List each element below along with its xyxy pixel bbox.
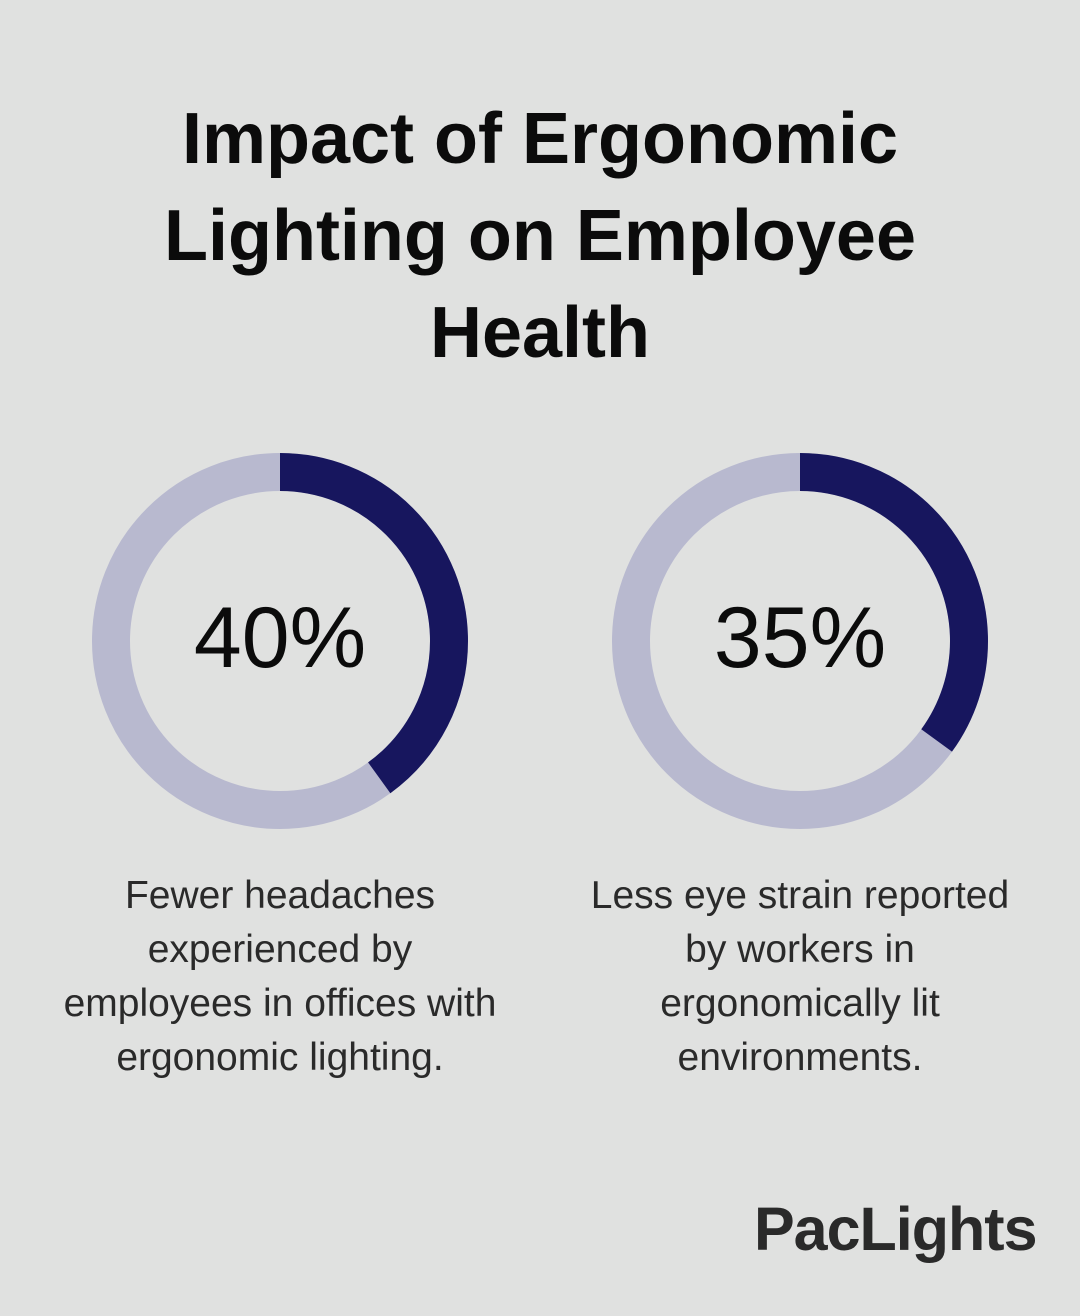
title: Lighting on Employee bbox=[164, 196, 916, 276]
description 1: Fewer headaches bbox=[125, 874, 435, 917]
stat: 35%: 35% bbox=[714, 590, 886, 686]
description 1 bbox=[64, 874, 496, 1079]
description 1: employees in offices with bbox=[64, 982, 496, 1025]
title bbox=[164, 99, 916, 373]
title: Impact of Ergonomic bbox=[182, 99, 898, 179]
description 1: experienced by bbox=[148, 928, 412, 971]
title: Health bbox=[430, 293, 650, 373]
description 1: ergonomic lighting. bbox=[116, 1036, 444, 1079]
description 2 bbox=[591, 874, 1009, 1079]
description 2: by workers in bbox=[685, 928, 915, 971]
description 2: Less eye strain reported bbox=[591, 874, 1009, 917]
description 2: environments. bbox=[678, 1036, 922, 1079]
logo: PacLights bbox=[754, 1195, 1037, 1263]
stat: 40%: 40% bbox=[194, 590, 366, 686]
donut ring 1 bbox=[111, 472, 449, 810]
description 2: ergonomically lit bbox=[660, 982, 940, 1025]
donut ring 2 bbox=[631, 472, 969, 810]
